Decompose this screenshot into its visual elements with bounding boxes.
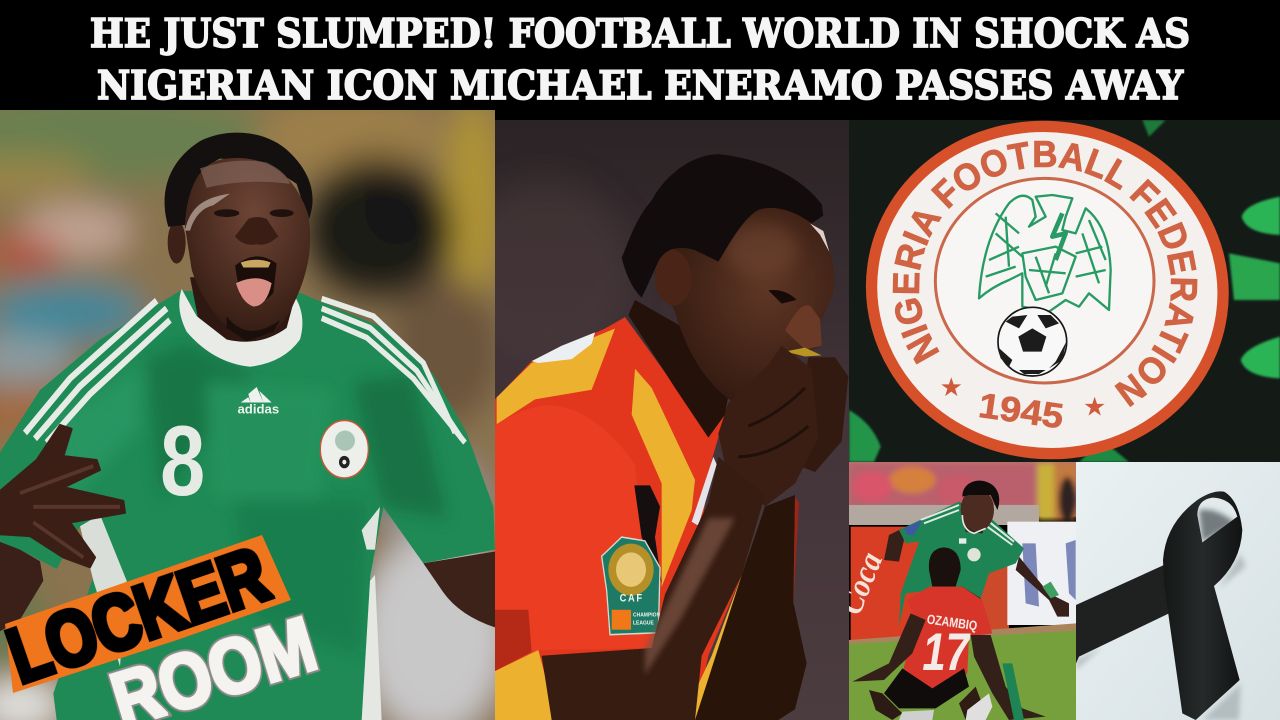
cheek sheen bbox=[725, 223, 798, 277]
crest disc: NIGERIA FOOTBALL FEDERATION bbox=[892, 140, 1198, 408]
panel: nigeria football federation crest bbox=[849, 120, 1280, 462]
head bbox=[655, 205, 834, 403]
hair bbox=[622, 154, 823, 298]
yellow body bbox=[495, 650, 557, 720]
green player bbox=[884, 481, 1069, 627]
red and yellow jersey bbox=[495, 317, 742, 720]
black strip bbox=[634, 485, 662, 583]
crest on shirt bbox=[320, 420, 368, 478]
ear bbox=[168, 221, 186, 264]
green jersey bbox=[0, 291, 495, 720]
CAF sleeve badge: CHAMPIONS bbox=[633, 612, 664, 619]
shirt number 8: 8 bbox=[160, 405, 205, 517]
far hand bbox=[795, 357, 848, 472]
title bbox=[90, 11, 1190, 109]
sleeve shade bbox=[495, 650, 538, 671]
forearm far / upper arm bbox=[695, 495, 807, 720]
yellow collar panel bbox=[632, 369, 695, 587]
adidas logo: adidas bbox=[237, 402, 279, 417]
blurred stadium background bbox=[0, 110, 495, 720]
right arm bbox=[423, 552, 495, 627]
shoulder stripes left bbox=[25, 301, 170, 443]
pitch bbox=[849, 625, 1076, 720]
ribbon shadow bbox=[1199, 509, 1236, 542]
ear bbox=[655, 248, 692, 306]
panel: celebrating player in green jersey bbox=[0, 110, 495, 720]
forearm near bbox=[542, 457, 765, 720]
CAF sleeve badge bbox=[602, 537, 664, 635]
stands bbox=[849, 460, 1076, 517]
panel: black mourning ribbon bbox=[1076, 460, 1280, 720]
header band bbox=[0, 0, 1280, 120]
advertising boards bbox=[851, 527, 922, 640]
shorts bbox=[884, 668, 969, 708]
colored stripe on collar bbox=[692, 457, 717, 526]
crest disc: ★ bbox=[1083, 392, 1106, 422]
eagle emblem bbox=[979, 195, 1111, 312]
eyes bbox=[214, 209, 239, 217]
arms bbox=[852, 613, 926, 682]
LOCKER wordmark: LOCKER bbox=[0, 530, 279, 700]
background glow bbox=[495, 187, 621, 332]
CAF sleeve badge: LEAGUE bbox=[633, 620, 654, 626]
sweat highlight on brow bbox=[185, 194, 230, 231]
yellow shoulder bbox=[497, 329, 615, 424]
shoulder stripes right bbox=[322, 299, 465, 443]
shirt bbox=[899, 502, 1024, 627]
panel: player kissing jersey badge bbox=[458, 120, 849, 720]
red player: 17 bbox=[922, 623, 971, 682]
ribbon loop and right tail bbox=[1163, 491, 1242, 720]
open mouth bbox=[235, 256, 277, 303]
adidas logo bbox=[238, 387, 279, 414]
neck bbox=[628, 300, 735, 438]
ribbon left tail bbox=[1076, 565, 1182, 663]
logo: locker room bbox=[0, 530, 326, 720]
inner ring bbox=[935, 178, 1154, 383]
gold medal on lips bbox=[785, 348, 822, 356]
stars: ★ bbox=[940, 373, 963, 403]
shirt text: OZAMBIQ bbox=[926, 611, 978, 633]
football bbox=[997, 307, 1067, 376]
hair bbox=[165, 133, 313, 227]
legs bbox=[869, 690, 902, 720]
title line two: NIGERIAN ICON MICHAEL ENERAMO PASSES AWAY bbox=[97, 63, 1184, 109]
left arm bbox=[0, 538, 43, 631]
hand bbox=[0, 425, 125, 567]
beard bbox=[227, 316, 280, 341]
nose bbox=[235, 217, 278, 245]
neck bbox=[190, 277, 293, 342]
panel: match action photo: Coca bbox=[832, 547, 890, 620]
curved federation name bbox=[919, 167, 1171, 383]
face bbox=[185, 158, 310, 340]
collar and head bbox=[961, 503, 989, 533]
jersey white side panels bbox=[80, 515, 127, 666]
jersey shading bbox=[50, 343, 447, 655]
closed eye and nose bbox=[768, 290, 797, 304]
forehead highlight bbox=[810, 223, 829, 252]
red player bbox=[852, 547, 1046, 720]
orange tag behind LOCKER bbox=[5, 535, 291, 693]
near hand bbox=[718, 346, 818, 506]
green fabric pattern bbox=[849, 120, 1280, 462]
panel: match action photo bbox=[832, 460, 1076, 720]
CAF sleeve badge: CAF bbox=[620, 593, 644, 605]
title line one: HE JUST SLUMPED! FOOTBALL WORLD IN SHOCK AS bbox=[90, 11, 1190, 57]
arms bbox=[884, 528, 904, 562]
founding year: 1945 bbox=[976, 386, 1066, 436]
sponsor patch on shoulder bbox=[532, 332, 595, 363]
white collar bbox=[179, 289, 302, 367]
